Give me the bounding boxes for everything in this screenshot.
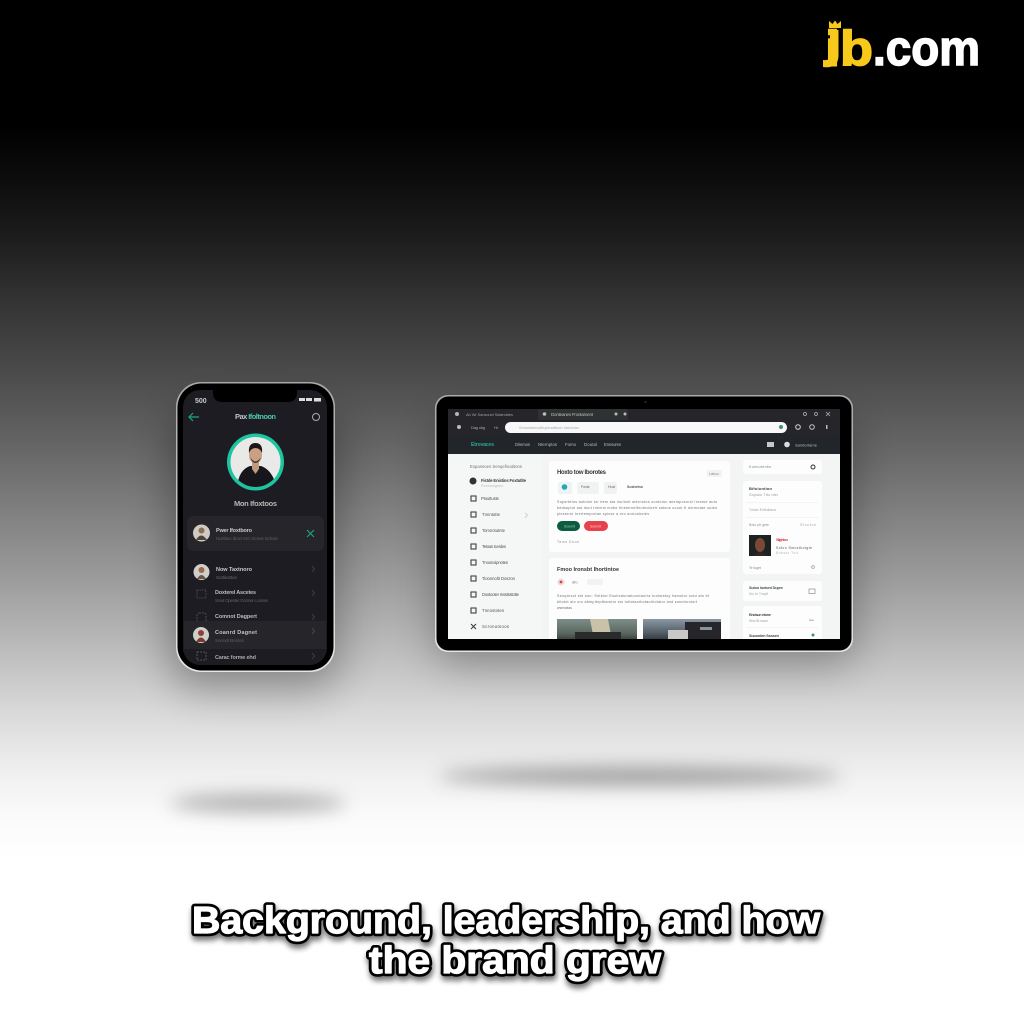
stats widget: [743, 606, 822, 639]
caption outline: Background, leadership, and how: [192, 900, 820, 942]
main card: top article: Lotoou: [709, 472, 719, 476]
profile name: Mon Ifoxtoos: [234, 499, 277, 508]
main card: top article: plestorsr Inertemprotan spicse a oro aroloshotes: [557, 512, 649, 516]
sidebar navigation: Tnnostotes: [482, 608, 504, 613]
phone status bar: 500: [195, 398, 207, 405]
note widget: Uto trr Tnsqft: [749, 592, 768, 596]
main card: second article: [549, 558, 730, 643]
sidebar navigation: Dootooter Insstsstotte: [482, 592, 520, 597]
photo: street buildings: [643, 619, 721, 639]
phone menu list: Carac forme ehd: [215, 655, 256, 661]
phone body: [176, 382, 335, 672]
profile widget: Tuntor Enflutbaos: [749, 508, 776, 512]
icon: crown: [829, 20, 841, 28]
profile widget: [743, 481, 822, 574]
main card: second article: Fmoo Ironsbt Ihortintoe: [557, 567, 619, 573]
caption outline: the brand grew: [369, 940, 661, 982]
address bar: [505, 422, 787, 433]
sidebar navigation: [470, 464, 528, 630]
main card: top article: Hoxto tow Iborotes: [557, 470, 607, 476]
caption text: Background, leadership, and how: [192, 900, 820, 942]
caption shadow: Background, leadership, and how: [193, 904, 821, 946]
phone notch: [213, 389, 297, 402]
site navigation bar: Etrovaces: [471, 442, 494, 448]
icon: close mark: [307, 530, 314, 537]
button: green: Sounnt: [564, 524, 575, 528]
profile widget: Boto ptr gete: [749, 523, 769, 527]
phone menu list: Doxterel Ascetes: [215, 590, 256, 596]
phone menu list: Coanrd Dagnet: [215, 630, 257, 636]
browser chrome: Donteanes Frontament: [551, 412, 594, 417]
main card: second article: bitotot ato oro ablepibrptbarotor sto tottotaorbotaolrtolator and sunotorotort: [557, 600, 697, 604]
tablet mockup: [435, 395, 853, 652]
phone status bar: [195, 398, 321, 405]
sidebar navigation: Ptouttuste: [481, 496, 500, 501]
phone menu list: Srout Openter Gormen Losses: [215, 598, 269, 603]
floating shadows beneath devices: [170, 410, 855, 812]
profile widget: Bnbsar Tott: [776, 551, 798, 555]
browser chrome: Hr: [494, 425, 499, 430]
caption shadow: the brand grew: [370, 944, 662, 986]
main card: top article: Tams Doon: [557, 540, 579, 544]
right column widgets: [743, 460, 822, 646]
site navigation bar: Ennsores: [604, 442, 621, 447]
button: red: Sounnt: [590, 524, 601, 528]
tablet screen background: [542, 454, 840, 639]
main card: second article: wsrnstsss: [557, 606, 572, 610]
logo: jb.com: [823, 20, 978, 68]
main card: second article: dfo: [572, 580, 578, 584]
sidebar navigation: Fistde Enistins Foxtutite: [481, 478, 527, 483]
phone menu list: Comnot Dagpert: [215, 614, 257, 620]
profile widget: Sfonton: [800, 523, 816, 527]
button: green: [557, 521, 580, 531]
sidebar navigation: Tioonnoltt Doszon: [482, 576, 516, 581]
sidebar navigation: Scronutsoos: [482, 624, 509, 629]
stats widget: ono: [809, 618, 814, 622]
logo j stem and hook: [823, 30, 838, 67]
site navigation bar: Fomo: [565, 442, 577, 447]
main card: top article: [549, 461, 730, 552]
sidebar navigation: Tomnotutnte: [482, 528, 506, 533]
phone header: [189, 412, 320, 421]
caption text: the brand grew: [369, 940, 661, 982]
main card: top article: Foste: [581, 485, 590, 489]
phone menu list: [184, 564, 326, 661]
main card: top article: Sushetno: [627, 485, 643, 489]
note widget: [743, 581, 822, 601]
sidebar navigation: Fonttonlghes: [481, 484, 503, 488]
caption text: [192, 900, 820, 982]
browser chrome: Dag uhg: [471, 425, 485, 430]
site navigation bar: Doutal: [584, 442, 597, 447]
sidebar navigation: Tetoas Icerdes: [482, 544, 506, 549]
sidebar navigation: Tnoonoipnotes: [482, 560, 508, 565]
profile widget: Slighton: [776, 537, 789, 542]
highlighted list card: Nutrition Iboxt Sen Scrvet Schute: [216, 536, 278, 541]
site navigation bar: [448, 435, 840, 454]
site navigation bar: Driemos: [515, 442, 530, 447]
site navigation bar: Nternptos: [538, 442, 557, 447]
highlighted list card: Pwer Ifoxtboro: [216, 528, 253, 534]
main card: top article: Supsrtetos autolon tor bem ata inuliont aternotos oontoton anelapocorsi Inratoe auto: [557, 500, 717, 504]
sidebar navigation: Expansoes Senqefinatitons: [470, 464, 522, 469]
main card: top article: bedsuplot ast dunt tnectm mobe tinestrnetfnotedurelt satsus ocuot tt dormotae outes: [557, 506, 717, 510]
stats widget: Suoorden Sossen: [749, 634, 780, 638]
button: red: [584, 521, 608, 531]
camera: [644, 401, 646, 403]
profile avatar with teal ring: [227, 434, 284, 490]
tablet body: [435, 395, 853, 652]
logo letters jb: jb: [824, 22, 873, 76]
profile widget: Bifuluntion: [749, 486, 773, 491]
caption outline: [192, 900, 820, 982]
highlighted list card: [187, 516, 324, 551]
phone header: Pax Ifoltnoon: [235, 412, 276, 421]
phone screen: [183, 390, 327, 665]
main card: top article: Host: [608, 485, 615, 489]
phone mockup: [176, 382, 335, 672]
photo: building lobby: [557, 619, 637, 639]
browser chrome: Sonwatolcodfoydoodtuon otorootsr: [519, 426, 580, 430]
profile widget: Sofon Smoxthotgte: [776, 546, 812, 550]
profile widget: Gopstor Trto oter: [749, 493, 779, 497]
profile widget: Te tuget: [749, 566, 761, 570]
search widget: Konnutenbs: [749, 465, 771, 469]
sidebar navigation: Tnnntotte: [482, 512, 501, 517]
phone menu list: Now Taxtnoro: [216, 567, 253, 573]
card avatar: [193, 524, 210, 542]
phone menu list: Soroxtt Boston: [215, 638, 244, 643]
phone menu list: Sottiextton: [216, 575, 237, 580]
main card: second article: Seoqrnsot ste son: Sntblot Esuhsdunabunotautra tuolmatoy hamotor sotd ato bt: [557, 594, 709, 598]
browser chrome: Ab Wr Sansouet Sdatrobtes: [466, 412, 513, 417]
stats widget: Hblo Bt snour: [749, 619, 769, 623]
caption shadow: [193, 904, 821, 986]
search widget: [743, 460, 822, 474]
logo domain text: .com: [873, 22, 980, 76]
site navigation bar: Sandortame: [795, 442, 818, 448]
note widget: Sutoo Iuntont Dupre: [749, 586, 783, 590]
stats widget: Endsun etone: [749, 613, 771, 617]
caption title: [192, 900, 821, 986]
browser chrome: [448, 409, 840, 435]
